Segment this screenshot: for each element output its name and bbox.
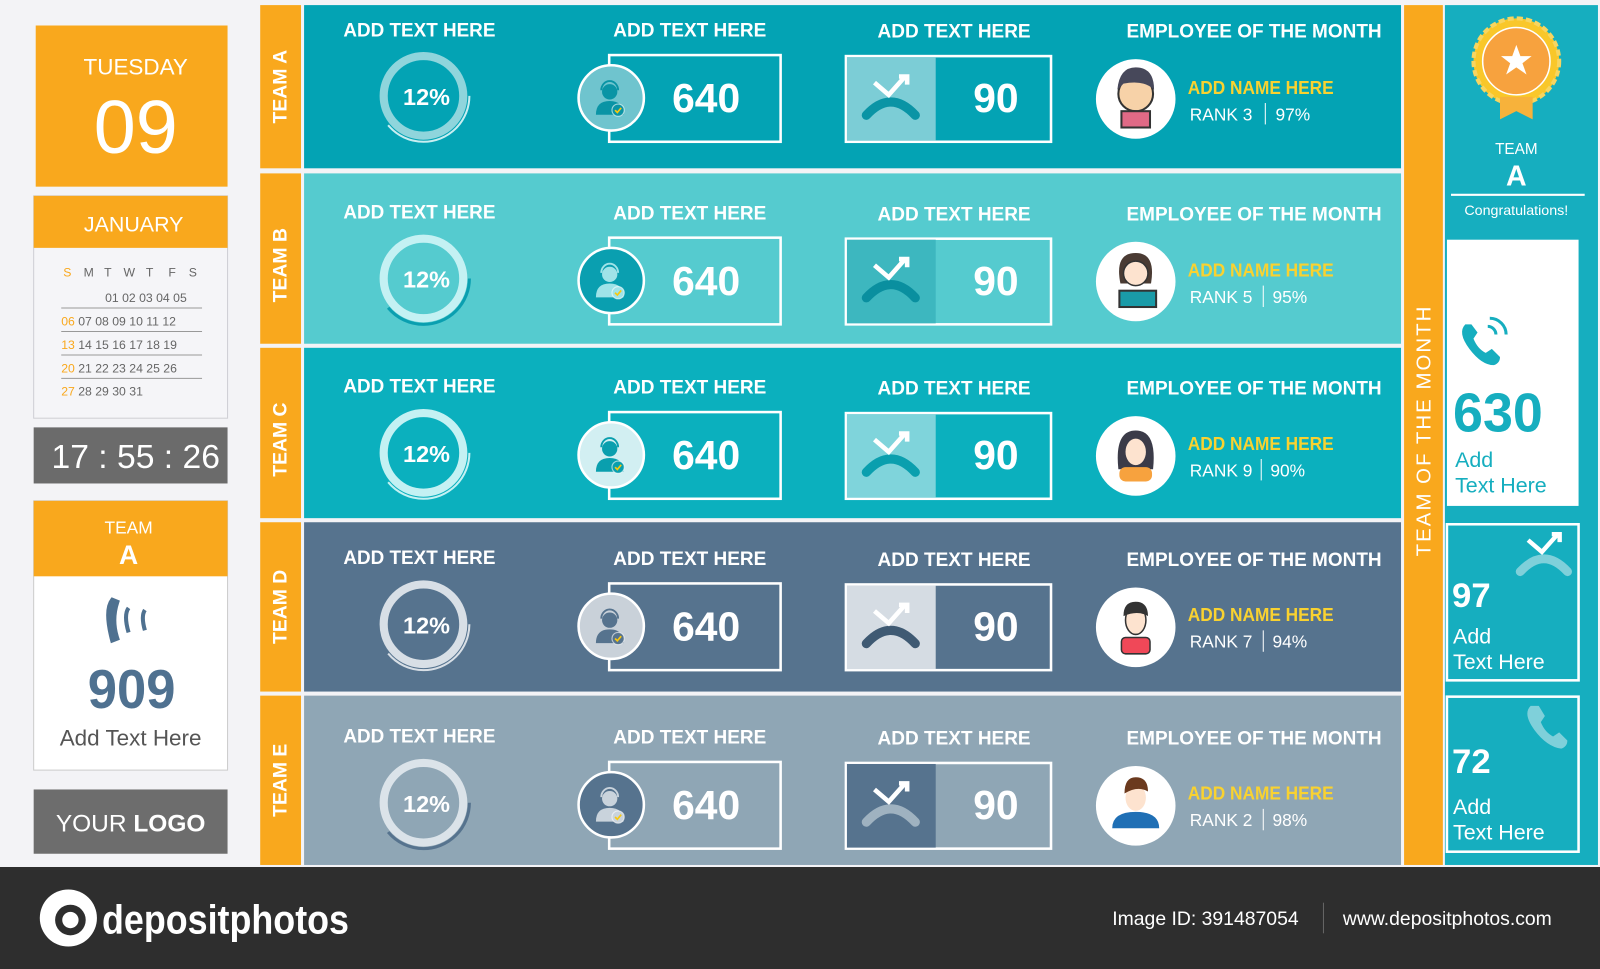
row: team C: [260, 348, 1401, 518]
row: team D: ADD NAME HERE: [1188, 604, 1334, 625]
row: team C: ADD NAME HERE: [1188, 433, 1334, 454]
row: team B: [260, 173, 1401, 344]
icon: award badge: [1473, 18, 1559, 119]
clock: 17 : 55 : 26: [51, 439, 220, 476]
row: team E: EMPLOYEE OF THE MONTH: [1127, 728, 1382, 750]
row: team C: ADD TEXT HERE: [343, 376, 495, 398]
row: team E: ADD TEXT HERE: [613, 727, 766, 749]
stat card: 72: [1447, 697, 1579, 852]
row: team D: ADD TEXT HERE: [878, 549, 1031, 571]
row: team B: 90: [973, 258, 1019, 304]
row: team A: 97%: [1276, 104, 1310, 124]
row: team E: 90: [973, 782, 1019, 828]
date card: 09: [94, 85, 178, 169]
row: team E: ADD TEXT HERE: [343, 726, 495, 748]
row: team B: EMPLOYEE OF THE MONTH: [1127, 203, 1382, 225]
calendar: F: [168, 265, 176, 279]
stat card: 72: 72: [1452, 743, 1491, 781]
right panel: winner: A: [1506, 161, 1527, 193]
team A card: [34, 501, 228, 770]
row: team E: 12%: [403, 791, 450, 817]
row: team D: TEAM D: [270, 570, 292, 644]
row: team A: [260, 5, 1401, 168]
row: team C: 90: [973, 432, 1019, 478]
icon: camera logo: [40, 889, 97, 947]
row: team B: ADD TEXT HERE: [878, 203, 1031, 225]
row: team B: 12%: [403, 267, 450, 293]
team A card: TEAM: [104, 517, 153, 537]
row: team D: [260, 522, 1401, 692]
row: team D: ADD TEXT HERE: [613, 548, 766, 570]
stat card: 97: [1447, 524, 1579, 680]
date card: TUESDAY: [84, 54, 188, 79]
row: team E: ADD TEXT HERE: [878, 728, 1031, 750]
vertical banner: team of the month: TEAM OF THE MONTH: [1414, 305, 1436, 556]
row: team A: ADD TEXT HERE: [343, 20, 495, 42]
stat card: 630: [1447, 240, 1579, 506]
calendar: 06 07 08 09 10 11 12: [61, 314, 176, 328]
row: team E: 98%: [1272, 810, 1307, 830]
row: team E: [260, 696, 1401, 865]
row: team A: 640: [672, 75, 740, 121]
row: team C: EMPLOYEE OF THE MONTH: [1127, 378, 1382, 400]
calendar: M: [84, 265, 94, 279]
calendar: JANUARY: [84, 213, 183, 237]
row: team B: 640: [672, 258, 740, 304]
row: team A: 90: [973, 75, 1019, 121]
stat card: 97: Add: [1453, 625, 1491, 649]
row: team C: TEAM C: [270, 402, 292, 477]
stat card: 72: Text Here: [1453, 820, 1545, 844]
row: team A: 12%: [403, 84, 450, 110]
row: team B: ADD NAME HERE: [1188, 259, 1334, 280]
row: team C: ADD TEXT HERE: [878, 378, 1031, 400]
row: team B: RANK 5: [1190, 287, 1252, 307]
row: team B: TEAM B: [270, 228, 292, 302]
row: team C: 12%: [403, 441, 450, 467]
stat card: 630: 630: [1453, 381, 1543, 443]
row: team E: ADD NAME HERE: [1188, 783, 1334, 804]
vertical banner: team of the month: [1404, 5, 1443, 865]
stat card: 630: Text Here: [1455, 474, 1547, 498]
row: team A: ADD NAME HERE: [1188, 77, 1334, 98]
row: team A: TEAM A: [270, 50, 292, 123]
team A card: A: [119, 540, 138, 570]
row: team B: ADD TEXT HERE: [343, 201, 495, 223]
logo: [34, 789, 228, 854]
calendar: T: [104, 265, 112, 279]
row: team E: RANK 2: [1190, 810, 1252, 830]
row: team C: 640: [672, 432, 740, 478]
right panel: winner: Congratulations!: [1464, 203, 1568, 219]
row: team A: ADD TEXT HERE: [613, 20, 766, 42]
row: team B: 95%: [1272, 287, 1307, 307]
calendar: S: [63, 265, 71, 279]
calendar: 20 21 22 23 24 25 26: [61, 361, 177, 375]
calendar: 01 02 03 04 05: [105, 291, 187, 305]
row: team E: TEAM E: [270, 744, 292, 817]
row: team A: RANK 3: [1190, 104, 1252, 124]
stat card: 97: Text Here: [1453, 650, 1545, 674]
footer bar: [0, 867, 1600, 969]
footer bar: depositphotos: [102, 896, 349, 942]
calendar: 27 28 29 30 31: [61, 385, 143, 399]
row: team D: ADD TEXT HERE: [343, 547, 495, 569]
row: team A: EMPLOYEE OF THE MONTH: [1127, 21, 1382, 43]
row: team D: 12%: [403, 612, 450, 638]
stat card: 72: Add: [1453, 795, 1491, 819]
row: team D: EMPLOYEE OF THE MONTH: [1127, 549, 1382, 571]
team A card: Add Text Here: [60, 726, 202, 751]
clock: [34, 427, 228, 483]
stat card: 630: Add: [1455, 448, 1493, 472]
date card: [36, 26, 228, 187]
row: team D: 90: [973, 604, 1019, 650]
row: team D: RANK 7: [1190, 632, 1252, 652]
right panel: winner: TEAM: [1495, 141, 1538, 158]
row: team D: 640: [672, 604, 740, 650]
row: team B: ADD TEXT HERE: [613, 202, 766, 224]
footer bar: Image ID: 391487054: [1112, 908, 1299, 930]
row: team C: ADD TEXT HERE: [613, 377, 766, 399]
logo: YOUR LOGO: [56, 810, 205, 837]
calendar: T: [146, 265, 154, 279]
row: team A: ADD TEXT HERE: [878, 21, 1031, 43]
calendar: [34, 196, 228, 418]
row: team E: 640: [672, 782, 740, 828]
calendar: W: [123, 265, 135, 279]
right panel: winner: [1445, 5, 1598, 865]
icon: transfer phones: [108, 600, 145, 641]
row: team C: RANK 9: [1190, 460, 1252, 480]
calendar: 13 14 15 16 17 18 19: [61, 338, 177, 352]
row: team C: 90%: [1270, 460, 1305, 480]
footer bar: www.depositphotos.com: [1342, 908, 1552, 930]
calendar: S: [189, 265, 197, 279]
team A card: 909: [88, 658, 176, 720]
stat card: 97: 97: [1452, 577, 1491, 615]
left panel background: [0, 0, 253, 867]
row: team D: 94%: [1272, 632, 1307, 652]
